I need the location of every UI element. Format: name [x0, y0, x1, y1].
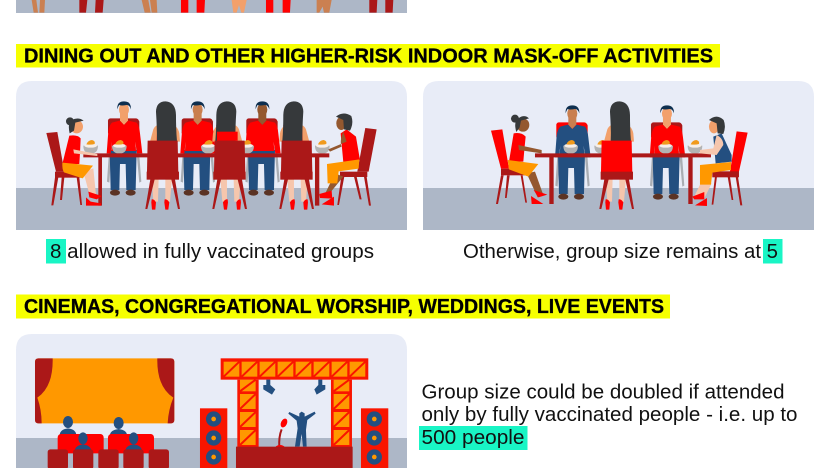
- seated man 2: [180, 101, 216, 196]
- side woman right: [692, 117, 748, 206]
- text block: group size doubled: Group size could be doubled if attended: [422, 382, 784, 404]
- seated man 1: [107, 101, 142, 196]
- back-view woman 1: [145, 101, 180, 210]
- text block: group size doubled: only by fully vaccinated people - i.e. up to: [422, 404, 798, 426]
- text block: group size doubled: [419, 382, 798, 450]
- cinema screen: [35, 358, 174, 423]
- text block: group size doubled: 500 people: [422, 427, 524, 449]
- side woman right: [319, 113, 377, 206]
- seated man red shirt: [650, 105, 685, 200]
- back-view woman 2: [212, 101, 247, 210]
- legs row cropped at top: [32, 0, 393, 13]
- cinema audience: [48, 416, 169, 468]
- seated man blue shirt: [555, 105, 591, 200]
- table: [535, 153, 711, 204]
- stage lights: [263, 380, 325, 395]
- panel: group of 8 dining: [16, 81, 407, 230]
- panel: group of 5 dining: [423, 81, 814, 230]
- bowls: [83, 140, 330, 153]
- caption: otherwise 5: Otherwise, group size remains at 5: [463, 241, 778, 263]
- side woman left: [491, 115, 547, 204]
- seated man 3: [245, 101, 281, 196]
- stage truss: [221, 358, 368, 448]
- speakers: [200, 408, 388, 468]
- panel: cinema and stage: [16, 334, 407, 468]
- caption: 8 allowed: 8 allowed in fully vaccinated groups: [50, 241, 374, 263]
- side woman left: [46, 117, 102, 206]
- back-view woman: [599, 101, 634, 210]
- heading: dining out: DINING OUT AND OTHER HIGHER-RISK INDOOR MASK-OFF ACTIVITIES: [24, 46, 713, 68]
- panel: top strip illustration: [16, 0, 407, 13]
- heading: cinemas: CINEMAS, CONGREGATIONAL WORSHIP, WEDDINGS, LIVE EVENTS: [24, 296, 664, 318]
- performer and microphone: [275, 412, 316, 447]
- bowls: [563, 140, 702, 153]
- back-view woman 3: [279, 101, 314, 210]
- table: [83, 153, 329, 206]
- stage platform: [236, 447, 353, 468]
